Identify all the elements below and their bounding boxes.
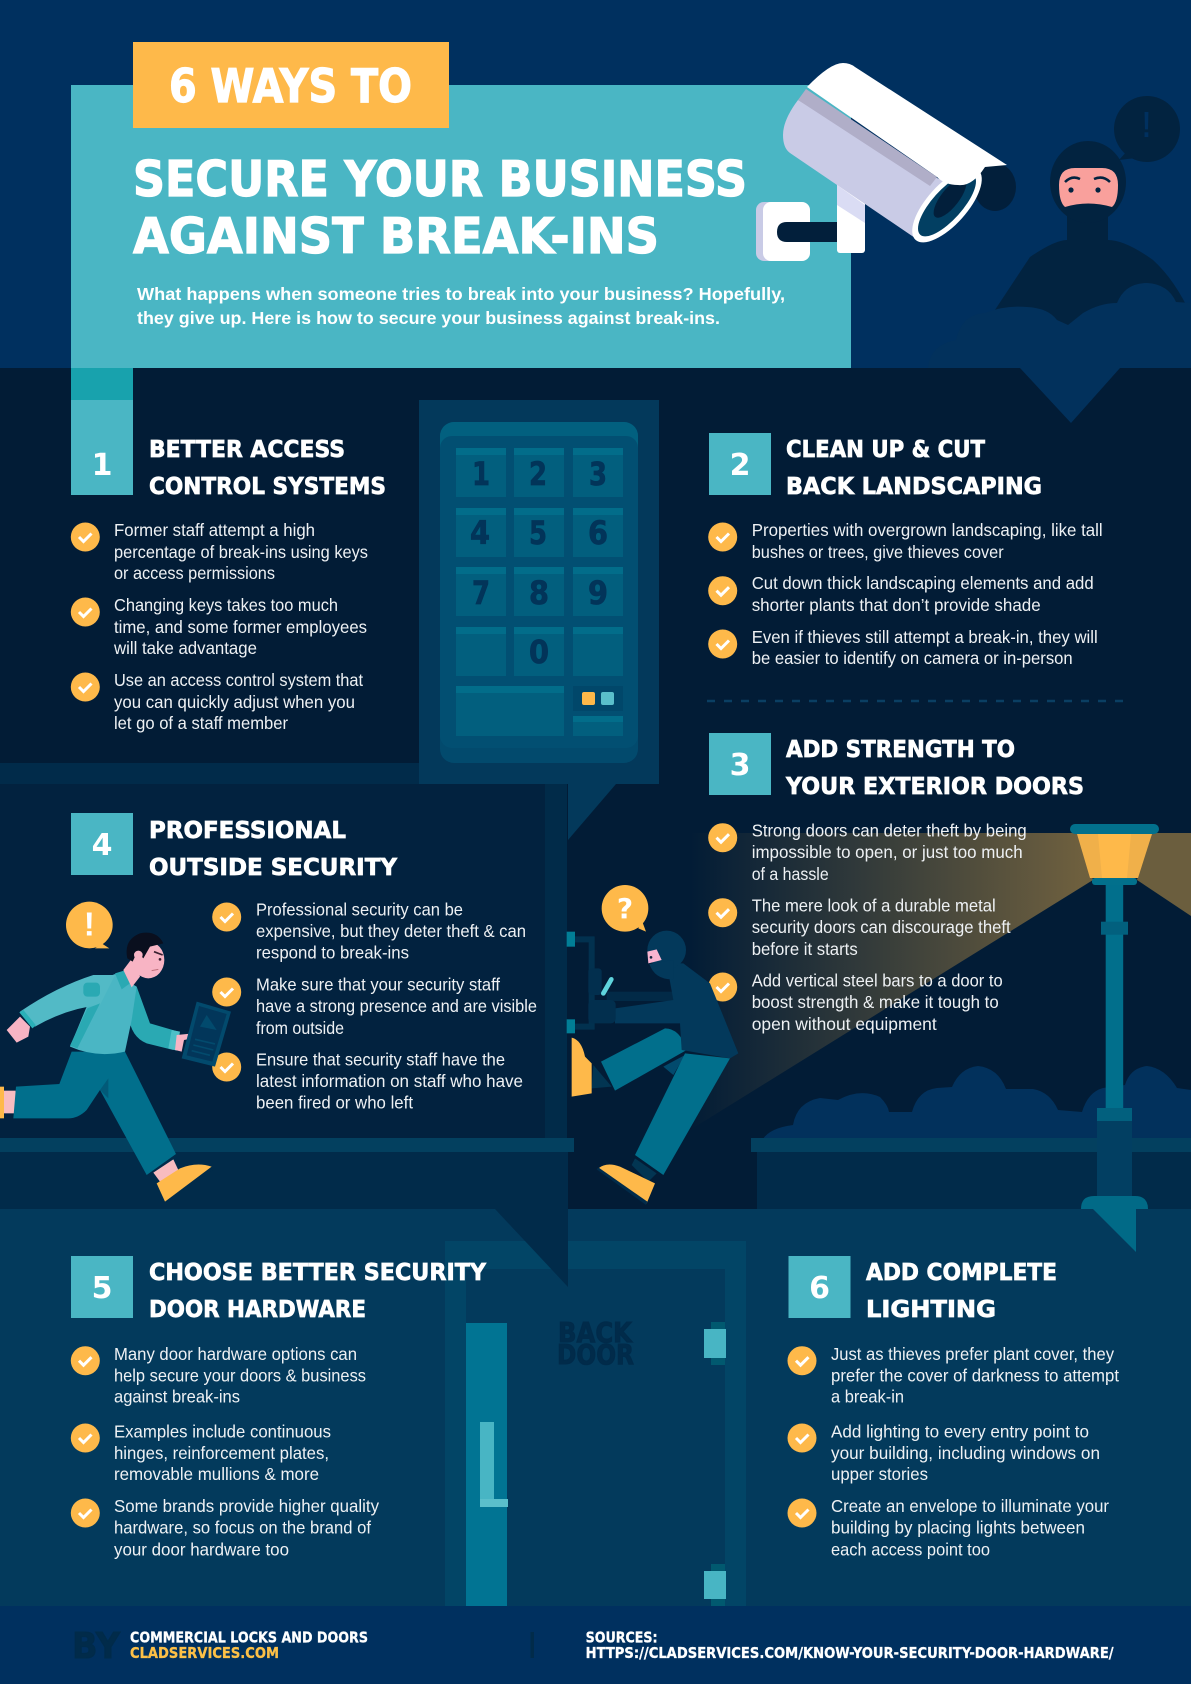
heading 3: YOUR EXTERIOR DOORS <box>785 774 1084 800</box>
number badge 5: 5 <box>92 1271 112 1306</box>
number badge 3: 3 <box>730 748 750 783</box>
text block 4: been fired or who left <box>256 1093 413 1113</box>
text block 6: each access point too <box>831 1540 990 1560</box>
header panel: teal title block <box>71 85 851 433</box>
text block 6 <box>831 1344 1119 1560</box>
panel: section 1 access control <box>71 433 386 733</box>
text block 2: bushes or trees, give thieves cover <box>752 542 1004 562</box>
door handle bracket <box>567 932 592 1033</box>
text block 1: let go of a staff member <box>114 713 288 733</box>
icon: keypad device: 2 <box>529 455 547 493</box>
text block 6: Just as thieves prefer plant cover, they <box>831 1344 1114 1364</box>
text block 6: your building, including windows on <box>831 1443 1100 1463</box>
bullet icons 6 <box>788 1346 816 1528</box>
text block 2: Even if thieves still attempt a break-in, they will <box>752 627 1098 647</box>
icon: keypad device: 0 <box>529 633 549 671</box>
text block 4: Make sure that your security staff <box>256 975 500 995</box>
heading 2: CLEAN UP & CUT <box>786 437 985 463</box>
illustration: running security guard <box>0 902 231 1203</box>
sources: HTTPS://CLADSERVICES.COM/KNOW-YOUR-SECURITY-DOOR-HARDWARE/ <box>586 1644 1114 1662</box>
text block 1: Use an access control system that <box>114 670 363 690</box>
icon: street lamp <box>1070 824 1159 1209</box>
icon: lurking thief with speech bubble: ! <box>1142 104 1151 145</box>
text block 4: have a strong presence and are visible <box>256 996 537 1016</box>
panel: section 2 landscaping <box>708 433 1103 668</box>
door sign: BACK <box>558 1316 633 1349</box>
panel: section 5 door hardware <box>71 1256 486 1560</box>
bushes on right wall <box>763 1066 1191 1140</box>
footer <box>0 1606 1191 1684</box>
bushes and pointer beneath thief <box>928 283 1191 423</box>
text block 6: Create an envelope to illuminate your <box>831 1496 1109 1516</box>
icon: keypad device: 5 <box>529 514 547 552</box>
heading 5: CHOOSE BETTER SECURITY <box>149 1260 486 1286</box>
icon: keypad device: 3 <box>589 455 607 493</box>
heading 5: DOOR HARDWARE <box>149 1297 366 1323</box>
title: AGAINST BREAK-INS <box>133 208 659 265</box>
panel: section 6 lighting <box>788 1256 1119 1560</box>
number badge 4: 4 <box>92 828 112 863</box>
text block 3: Add vertical steel bars to a door to <box>752 971 1003 991</box>
ledge on right wall <box>751 1138 1191 1152</box>
text block 1: you can quickly adjust when you <box>114 692 355 712</box>
text block 4: from outside <box>256 1018 344 1038</box>
text block 5: help secure your doors & business <box>114 1366 366 1386</box>
heading 4: OUTSIDE SECURITY <box>149 855 397 881</box>
company credit: CLADSERVICES.COM <box>130 1644 279 1662</box>
text block 3: open without equipment <box>752 1014 937 1034</box>
text block 6: Add lighting to every entry point to <box>831 1421 1089 1441</box>
company credit <box>130 1628 368 1662</box>
panel: section 4 outside security <box>71 813 537 1113</box>
heading 2: BACK LANDSCAPING <box>786 474 1042 500</box>
number badge 1: 1 <box>92 448 112 483</box>
light beam from street lamp <box>690 833 1191 1130</box>
text block 4 <box>256 900 537 1113</box>
text block 6: a break-in <box>831 1387 904 1407</box>
sources <box>586 1628 1114 1662</box>
text block 1: time, and some former employees <box>114 617 367 637</box>
heading 1 <box>149 437 386 500</box>
text block 3: Strong doors can deter theft by being <box>752 821 1027 841</box>
title tag: 6 ways to <box>133 42 449 128</box>
text block 1 <box>113 520 368 733</box>
icon: keypad device: 1 <box>472 455 490 493</box>
number badge 2 <box>709 433 771 495</box>
icon: lurking thief with speech bubble <box>985 96 1191 345</box>
heading 6: LIGHTING <box>866 1297 996 1323</box>
text block 5: Many door hardware options can <box>114 1344 357 1364</box>
text block 5: removable mullions & more <box>114 1464 319 1484</box>
icon: security camera <box>756 63 1016 261</box>
intro text: they give up. Here is how to secure your business against break-ins. <box>137 308 720 328</box>
text block 4: Ensure that security staff have the <box>256 1050 505 1070</box>
text block 5: your door hardware too <box>114 1540 289 1560</box>
text block 3: security doors can discourage theft <box>752 917 1011 937</box>
text block 5: hardware, so focus on the brand of <box>114 1518 371 1538</box>
illustration: thief climbing at door <box>567 885 738 1205</box>
text block 1: or access permissions <box>114 563 275 583</box>
title tag: 6 ways to: 6 WAYS TO <box>169 59 412 113</box>
bullet icons 1 <box>71 522 100 702</box>
heading 3 <box>785 737 1084 800</box>
illustration: back door <box>445 1241 746 1606</box>
text block 5: Examples include continuous <box>114 1421 331 1441</box>
icon: keypad device: 6 <box>588 514 608 552</box>
by mark: BY <box>72 1626 121 1667</box>
number badge 4 <box>71 813 133 875</box>
tablet <box>182 1002 231 1067</box>
text block 4: Professional security can be <box>256 900 463 920</box>
heading 3: ADD STRENGTH TO <box>786 737 1015 763</box>
text block 6: prefer the cover of darkness to attempt <box>831 1366 1119 1386</box>
heading 4: PROFESSIONAL <box>149 818 346 844</box>
text block 5 <box>114 1344 379 1560</box>
text block 5: Some brands provide higher quality <box>114 1496 379 1516</box>
icon: keypad device: 8 <box>529 574 549 612</box>
sources: SOURCES: <box>586 1628 658 1646</box>
door sign <box>557 1316 634 1371</box>
number badge 1 <box>71 433 133 495</box>
speech bubble: exclamation <box>66 902 113 948</box>
text block 1: will take advantage <box>113 638 257 658</box>
keypad panel <box>419 400 659 840</box>
bullet icons 5 <box>71 1346 100 1528</box>
speech bubble: question: ? <box>617 892 633 925</box>
text block 3 <box>752 821 1027 1034</box>
title: SECURE YOUR BUSINESS <box>133 151 747 208</box>
speech bubble: question <box>602 885 648 932</box>
text block 5: against break-ins <box>114 1387 240 1407</box>
text block 2: Cut down thick landscaping elements and add <box>752 573 1094 593</box>
number badge 6 <box>788 1256 850 1318</box>
intro text: What happens when someone tries to break into your business? Hopefully, <box>137 284 785 304</box>
text block 4: respond to break-ins <box>256 943 409 963</box>
text block 3: boost strength & make it tough to <box>752 992 999 1012</box>
panel: section 3 exterior doors <box>708 733 1084 1034</box>
text block 4: latest information on staff who have <box>256 1071 523 1091</box>
icon: keypad device <box>440 422 638 763</box>
text block 5: hinges, reinforcement plates, <box>114 1443 329 1463</box>
heading 4 <box>149 818 397 881</box>
door sign: DOOR <box>557 1338 634 1371</box>
intro text <box>137 284 785 328</box>
icon: keypad device: 9 <box>588 574 608 612</box>
text block 1: percentage of break-ins using keys <box>114 542 368 562</box>
text block 2: Properties with overgrown landscaping, like tall <box>752 520 1103 540</box>
bottom section background <box>0 1209 1191 1606</box>
bullet icons 2 <box>708 522 737 658</box>
heading 6 <box>866 1260 1057 1323</box>
text block 2: be easier to identify on camera or in-person <box>752 648 1073 668</box>
text block 3: impossible to open, or just too much <box>752 842 1023 862</box>
text block 6: upper stories <box>831 1464 928 1484</box>
heading 1: CONTROL SYSTEMS <box>149 474 386 500</box>
title <box>133 151 747 265</box>
text block 1: Former staff attempt a high <box>114 520 315 540</box>
bullet icons 3 <box>708 823 737 1002</box>
company credit: COMMERCIAL LOCKS AND DOORS <box>130 1628 368 1646</box>
icon: keypad device: 7 <box>472 574 490 612</box>
text block 4: expensive, but they deter theft & can <box>256 921 526 941</box>
text block 6: building by placing lights between <box>831 1518 1085 1538</box>
heading 5 <box>149 1260 486 1323</box>
number badge 3 <box>709 733 771 795</box>
text block 3: before it starts <box>752 939 858 959</box>
heading 2 <box>786 437 1042 500</box>
text block 2: shorter plants that don’t provide shade <box>752 595 1041 615</box>
speech bubble: exclamation: ! <box>84 906 95 943</box>
text block 2 <box>752 520 1103 668</box>
icon: keypad device: 4 <box>470 514 490 552</box>
heading 6: ADD COMPLETE <box>866 1260 1057 1286</box>
text block 3: The mere look of a durable metal <box>752 896 996 916</box>
number badge 6: 6 <box>809 1271 830 1306</box>
number badge 5 <box>71 1256 133 1318</box>
text block 1: Changing keys takes too much <box>114 595 338 615</box>
number badge 2: 2 <box>730 448 750 483</box>
bullet icons 4 <box>212 902 241 1082</box>
text block 3: of a hassle <box>752 864 829 884</box>
heading 1: BETTER ACCESS <box>149 437 345 463</box>
